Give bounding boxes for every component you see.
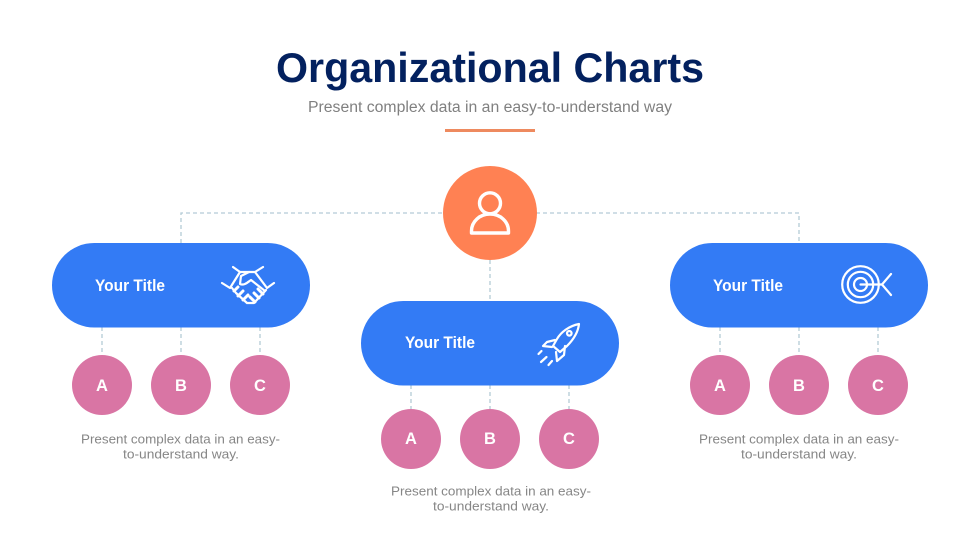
circle B xyxy=(151,355,211,415)
connector lines xyxy=(102,213,878,409)
subtitle: Present complex data in an easy-to-understand way xyxy=(308,99,672,116)
icon: person xyxy=(472,193,508,233)
panel: right branch: B xyxy=(793,377,805,395)
circle B xyxy=(460,409,520,469)
icon: target xyxy=(842,266,891,303)
top node: person xyxy=(443,166,537,260)
center description: Present complex data in an easy- xyxy=(391,484,591,498)
panel: right branch: A xyxy=(714,377,726,395)
title: Organizational Charts xyxy=(276,44,704,91)
center pill xyxy=(361,301,619,386)
center pill title: Your Title xyxy=(405,334,475,352)
panel: left branch: to-understand way. xyxy=(123,446,239,462)
panel: left branch: C xyxy=(254,377,266,395)
right description: Present complex data in an easy- xyxy=(699,432,899,446)
left pill xyxy=(52,243,310,328)
circle C xyxy=(848,355,908,415)
panel: left branch xyxy=(52,243,310,462)
panel: center branch: B xyxy=(484,430,496,448)
panel: left branch: A xyxy=(96,377,108,395)
panel: center branch: A xyxy=(405,430,417,448)
circle A xyxy=(381,409,441,469)
icon: rocket xyxy=(538,324,579,365)
left pill title: Your Title xyxy=(95,277,165,295)
circle A xyxy=(690,355,750,415)
panel: left branch: B xyxy=(175,377,187,395)
panel: center branch: C xyxy=(563,430,575,448)
left description: Present complex data in an easy- xyxy=(81,432,280,446)
circle B xyxy=(769,355,829,415)
right pill xyxy=(670,243,928,328)
circle C xyxy=(230,355,290,415)
circle A xyxy=(72,355,132,415)
accent bar xyxy=(445,129,535,132)
panel: right branch xyxy=(670,243,928,462)
icon: handshake xyxy=(222,267,274,303)
circle C xyxy=(539,409,599,469)
panel: right branch: C xyxy=(872,377,884,395)
right pill title: Your Title xyxy=(713,277,783,295)
panel: center branch: to-understand way. xyxy=(433,498,549,514)
panel: center branch xyxy=(361,301,619,514)
panel: right branch: to-understand way. xyxy=(741,446,857,462)
